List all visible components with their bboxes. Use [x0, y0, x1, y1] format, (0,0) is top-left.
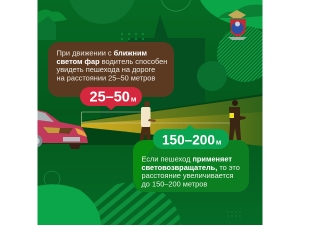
pedestrian near	[139, 101, 156, 142]
road band	[81, 94, 262, 145]
panel: low beam text: увидеть пешехода на дороге	[56, 65, 155, 74]
panel: reflector text: Если пешеход применяет	[142, 154, 232, 164]
callout: 25–50 m	[80, 87, 142, 110]
panel: low beam text: светом фар водитель способен	[56, 57, 167, 66]
headlight beam	[81, 96, 262, 146]
panel: low beam text: на расстоянии 25–50 метров	[56, 73, 155, 82]
green blob	[38, 184, 101, 225]
panel: reflector text: световозвращатель, то это	[142, 163, 240, 172]
panel: reflector text: расстояние увеличивается	[142, 171, 234, 180]
small ring	[44, 171, 60, 187]
callout: 25–50 m: 25–50м	[90, 90, 137, 106]
pedestrian with reflector	[229, 100, 246, 140]
panel: low beam text	[48, 42, 174, 97]
panel: reflector text	[133, 140, 249, 192]
callout: 150–200 m: 150–200м	[162, 132, 222, 148]
distance lines	[82, 112, 230, 123]
car	[38, 110, 88, 149]
icon: police emblem	[228, 10, 247, 40]
panel: low beam text: При движении с ближним	[56, 48, 147, 58]
striped circle	[94, 182, 182, 225]
infographic canvas	[38, 0, 262, 225]
callout: 150–200 m	[153, 125, 229, 149]
background scene	[38, 0, 273, 225]
panel: reflector text: до 150–200 метров	[142, 179, 207, 188]
